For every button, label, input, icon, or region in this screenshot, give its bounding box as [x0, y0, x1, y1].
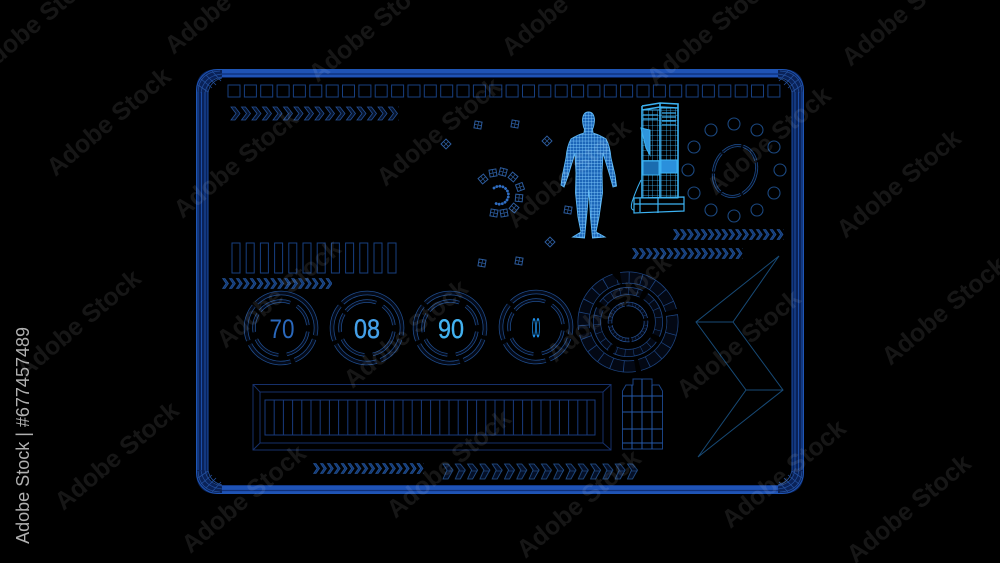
small radial spinner: [478, 168, 524, 217]
stock watermarks: Adobe Stock: [176, 439, 311, 559]
stock watermarks: Adobe Stock: [381, 404, 516, 524]
gauge: 70: [233, 280, 329, 376]
gauge value 08: 08: [354, 314, 380, 344]
frame corners mesh: [198, 71, 802, 492]
stock watermarks: Adobe Stock: [501, 114, 636, 234]
stock watermarks: Adobe Stock: [671, 284, 806, 404]
stock id side text: Adobe Stock | #677457489: [13, 327, 33, 544]
stock watermarks: Adobe Stock: [541, 248, 676, 368]
large segmented ring: [573, 267, 683, 377]
stock watermarks: Adobe Stock: [338, 274, 473, 394]
wireframe human figure: [561, 112, 616, 238]
stock watermarks: Adobe Stock: [701, 81, 836, 201]
lightning arrow: [696, 256, 783, 457]
stock watermarks: Adobe Stock: [831, 124, 966, 244]
gauge: 90: [402, 280, 498, 376]
stock watermarks: Adobe Stock: [168, 104, 303, 224]
battery: [622, 379, 662, 449]
chevron row: bottom small: [313, 463, 424, 474]
chevron row: right upper: [673, 229, 784, 240]
gauge: edge-on digits: [488, 279, 584, 375]
chevron row: right lower: [632, 248, 743, 259]
stock watermarks: Adobe Stock: [211, 234, 346, 354]
stock watermarks: Adobe Stock: [49, 396, 184, 516]
chevron row: bottom large: [442, 463, 639, 481]
stock watermarks: Adobe Stock: [716, 414, 851, 534]
wireframe phone booth: [631, 103, 684, 213]
stock watermarks: Adobe Stock: [11, 264, 146, 384]
bar slots: [265, 400, 595, 435]
frame: [196, 69, 804, 494]
stock watermarks: Adobe Stock: [41, 62, 176, 182]
chevron row: top left: [230, 106, 399, 121]
top square strip: [228, 85, 780, 97]
long slotted bar: [253, 384, 611, 450]
chevron row: above gauges: [222, 278, 332, 289]
floating tiles: [441, 120, 572, 267]
vertical bar strip: [232, 243, 396, 273]
gauge: edge-on digits: 00: [532, 313, 540, 343]
gauge value 70: 70: [270, 314, 294, 344]
stock watermarks: Adobe Stock: [371, 72, 506, 192]
stock watermarks: Adobe Stock: [511, 444, 646, 563]
gauge: 08: [319, 280, 415, 376]
gauge value 90: 90: [438, 314, 464, 344]
ring of small circles: [682, 118, 786, 222]
